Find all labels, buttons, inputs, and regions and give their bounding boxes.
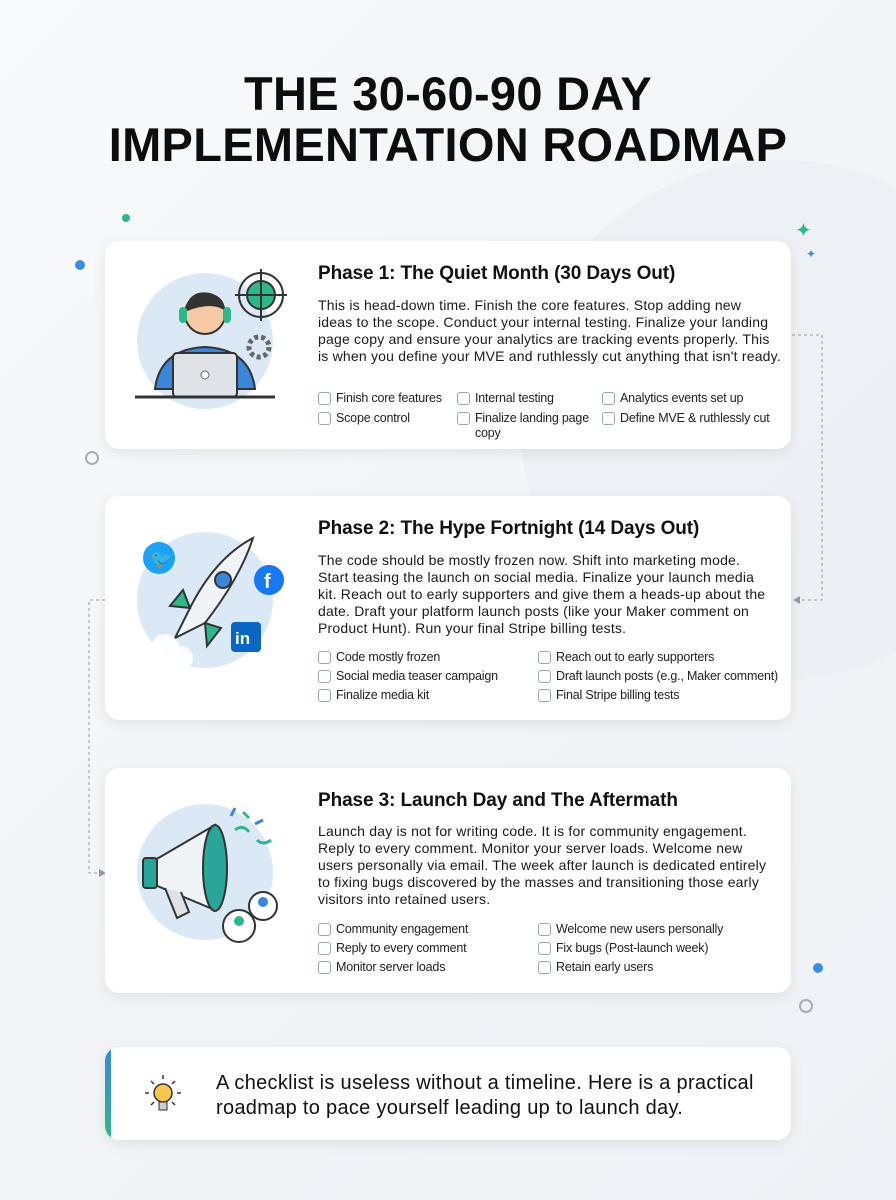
checklist: Community engagement [336,922,468,936]
text block: date. Draft your platform launch posts (like your Maker comment on [318,603,749,619]
icon: developer with headset [135,269,287,409]
checklist [318,922,724,974]
text block [318,552,765,636]
checklist: Analytics events set up [620,391,743,405]
icon: rocket with social: f [264,571,271,593]
icon: rocket with social: 🐦 [150,549,172,569]
text block: page copy and ensure your analytics are tracking events properly. This [318,331,770,347]
checklist: Social media teaser campaign [336,669,498,683]
checklist [318,650,778,702]
checklist: Draft launch posts (e.g., Maker comment) [556,669,778,683]
arrow: phase 1 to phase 2 [792,334,822,604]
checklist: Welcome new users personally [556,922,723,936]
text: ✦ [795,220,812,242]
panel: phase 3 [105,768,791,993]
text: ✦ [806,247,816,261]
text block: ideas to the scope. Conduct your internal testing. Finalize your landing [318,314,768,330]
text block [318,297,781,364]
heading: Phase 1: The Quiet Month (30 Days Out) [318,263,675,284]
text block [318,823,766,907]
checklist: Finish core features [336,391,442,405]
icon: light bulb [145,1075,181,1110]
title: IMPLEMENTATION ROADMAP [109,118,787,171]
heading: Phase 2: The Hype Fortnight (14 Days Out) [318,518,699,539]
text block: visitors into retained users. [318,891,490,907]
checklist: Internal testing [475,391,554,405]
checklist: Final Stripe billing tests [556,688,679,702]
checklist: Retain early users [556,960,653,974]
checklist: Reach out to early supporters [556,650,714,664]
text block: Start teasing the launch on social media. Finalize your launch media [318,569,754,585]
arrow: phase 2 to phase 3 [88,600,105,877]
title [109,67,787,171]
checklist: Code mostly frozen [336,650,440,664]
panel: phase 1 [105,241,791,449]
text block: Reply to every comment. Monitor your server loads. Welcome new [318,840,743,856]
icon: megaphone [137,804,278,943]
text block: A checklist is useless without a timeline. Here is a practical [216,1072,754,1094]
text block: Launch day is not for writing code. It is for community engagement. [318,823,747,839]
title: THE 30-60-90 DAY [244,67,652,120]
text block: kit. Reach out to early supporters and give them a heads-up about the [318,586,765,602]
callout [105,1047,791,1140]
checklist: Define MVE & ruthlessly cut [620,411,770,425]
checklist: copy [475,426,501,440]
text block: Product Hunt). Run your final Stripe billing tests. [318,620,626,636]
text block: is when you define your MVE and ruthlessly cut anything that isn't ready. [318,348,781,364]
text block: This is head-down time. Finish the core features. Stop adding new [318,297,741,313]
text block: roadmap to pace yourself leading up to launch day. [216,1097,683,1119]
checklist: Scope control [336,411,410,425]
heading: Phase 3: Launch Day and The Aftermath [318,790,678,811]
checklist: Finalize landing page [475,411,589,425]
checklist: Finalize media kit [336,688,429,702]
text block: The code should be mostly frozen now. Shift into marketing mode. [318,552,740,568]
icon: rocket with social: in [235,629,250,648]
text block [216,1072,754,1119]
checklist: Fix bugs (Post-launch week) [556,941,708,955]
panel: phase 2 [105,496,791,720]
text block: users personally via email. The week after launch is dedicated entirely [318,857,766,873]
icon: rocket with social [137,532,284,668]
text block: to fixing bugs discovered by the masses and transitioning those early [318,874,759,890]
checklist: Monitor server loads [336,960,445,974]
checklist: Reply to every comment [336,941,466,955]
checklist [318,391,770,440]
